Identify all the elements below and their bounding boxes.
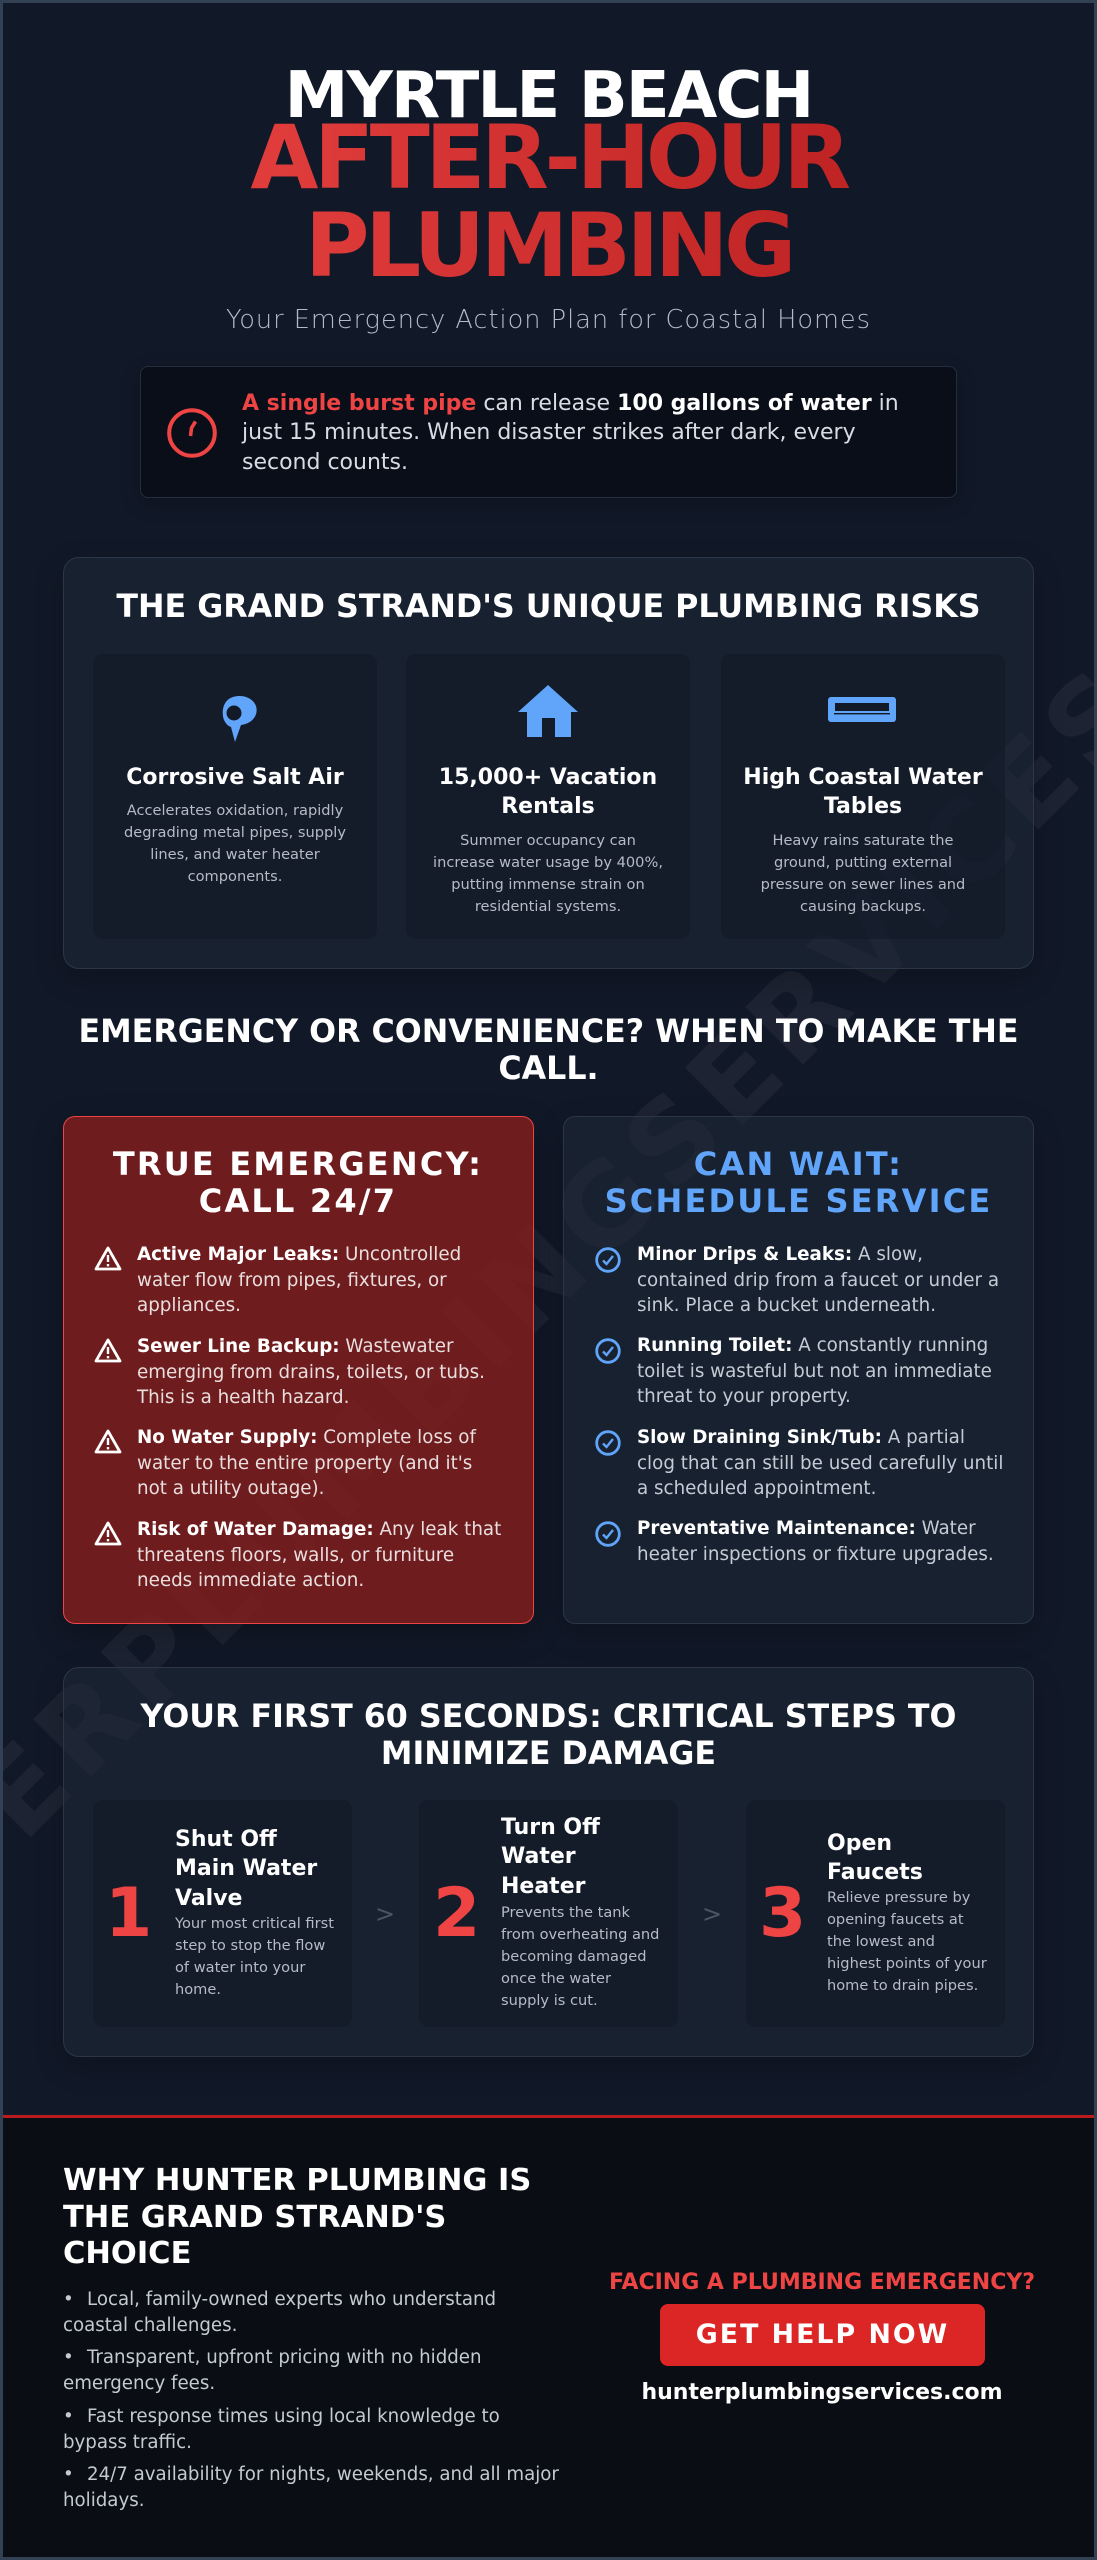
callout text xyxy=(242,391,899,475)
card title: Tables xyxy=(824,794,902,819)
website: hunterplumbingservices.com xyxy=(641,2380,1003,2405)
heading: plumbing risks: THE GRAND STRAND'S UNIQUE PLUMBING RISKS xyxy=(116,589,981,625)
step title: Heater xyxy=(501,1874,585,1899)
text: emerging from drains, toilets, or tubs. xyxy=(137,1362,485,1383)
step title: Shut Off xyxy=(175,1827,277,1852)
title line: After-Hour Plumbing: PLUMBING xyxy=(305,194,792,297)
list item: no water xyxy=(94,1427,476,1499)
icon: pin xyxy=(222,696,257,742)
step text: opening faucets at xyxy=(827,1911,964,1928)
list item: running toilet xyxy=(595,1335,992,1407)
bullet: Transparent, upfront pricing with no hidden xyxy=(87,2347,482,2368)
card: vacation rentals xyxy=(406,654,690,939)
text: Slow Draining Sink/Tub: A partial xyxy=(637,1427,965,1448)
footer xyxy=(0,2115,1097,2560)
text: toilet is wasteful but not an immediate xyxy=(637,1361,992,1382)
text: Running Toilet: A constantly running xyxy=(637,1335,988,1356)
step text: Your most critical first xyxy=(175,1915,334,1932)
bullet: 24/7 availability for nights, weekends, and all major xyxy=(87,2464,559,2485)
step text: highest points of your xyxy=(827,1955,987,1972)
callout text: A single burst pipe can release 100 gallons of water in xyxy=(242,391,899,416)
callout: burst pipe xyxy=(140,366,957,498)
heading: true emergency xyxy=(113,1145,483,1220)
cta prompt: FACING A PLUMBING EMERGENCY? xyxy=(609,2270,1035,2295)
step title: Turn Off xyxy=(501,1815,600,1840)
text: threatens floors, walls, or furniture xyxy=(137,1545,454,1566)
footer heading: CHOICE xyxy=(63,2236,191,2271)
bullet xyxy=(63,2462,559,2514)
list item: sewer backup xyxy=(94,1336,485,1408)
heading: true emergency: CALL 24/7 xyxy=(199,1182,397,1220)
heading: first 60 seconds xyxy=(140,1699,956,1772)
text: Preventative Maintenance: Water xyxy=(637,1518,976,1539)
icon: warning xyxy=(94,1246,122,1270)
heading: can wait: SCHEDULE SERVICE xyxy=(605,1182,992,1220)
card title: 15,000+ Vacation xyxy=(439,765,657,790)
panel: true emergency xyxy=(63,1116,534,1624)
icon: house xyxy=(518,685,578,737)
step text: from overheating and xyxy=(501,1926,659,1943)
icon: clock xyxy=(167,408,217,458)
bullet xyxy=(63,2287,496,2339)
heading: emergency or convenience xyxy=(78,1014,1018,1087)
card text: Accelerates oxidation, rapidly xyxy=(127,802,343,819)
step text: supply is cut. xyxy=(501,1992,598,2009)
list item: water damage xyxy=(94,1519,501,1591)
icon: check xyxy=(595,1521,621,1547)
text xyxy=(637,1335,992,1407)
card: salt air xyxy=(93,654,377,939)
text: No Water Supply: Complete loss of xyxy=(137,1427,476,1448)
text: contained drip from a faucet or under a xyxy=(637,1270,999,1291)
panel: can wait xyxy=(563,1116,1034,1624)
text: sink. Place a bucket underneath. xyxy=(637,1295,936,1316)
footer heading xyxy=(63,2163,531,2273)
step title xyxy=(827,1829,923,1888)
step 3 xyxy=(746,1800,1005,2027)
card title xyxy=(439,765,657,819)
panel: first 60 seconds xyxy=(63,1667,1034,2057)
list item: slow drain xyxy=(595,1427,1003,1499)
step text: home to drain pipes. xyxy=(827,1977,978,1994)
step title xyxy=(501,1813,600,1901)
heading: emergency or convenience: EMERGENCY OR CONVENIENCE? WHEN TO MAKE THE xyxy=(78,1014,1018,1050)
footer heading: WHY HUNTER PLUMBING IS xyxy=(63,2163,531,2198)
card title: Corrosive Salt Air xyxy=(126,765,344,790)
step text: Prevents the tank xyxy=(501,1904,630,1921)
step text: becoming damaged xyxy=(501,1948,646,1965)
icon: warning xyxy=(94,1430,122,1454)
number: 2 xyxy=(433,1874,480,1953)
text: heater inspections or fixture upgrades. xyxy=(637,1544,994,1565)
card text: Heavy rains saturate the xyxy=(772,832,954,849)
callout text: second counts. xyxy=(242,450,408,475)
title line: After-Hour Plumbing xyxy=(0,114,1097,290)
subtitle: Your Emergency Action Plan for Coastal Homes xyxy=(226,305,871,335)
bullet xyxy=(63,2404,500,2456)
card text: ground, putting external xyxy=(774,854,952,871)
step title: Faucets xyxy=(827,1860,923,1885)
card: water tables xyxy=(721,654,1005,939)
panel: coastal risks xyxy=(63,557,1034,969)
step text xyxy=(827,1887,987,1997)
icon: check xyxy=(595,1430,621,1456)
callout text: just 15 minutes. When disaster strikes after dark, every xyxy=(242,420,856,445)
footer heading: THE GRAND STRAND'S xyxy=(63,2200,446,2235)
step title: Open xyxy=(827,1831,892,1856)
step text: Relieve pressure by xyxy=(827,1889,970,1906)
bullet: • xyxy=(63,2406,74,2427)
cta button: GET HELP NOW xyxy=(696,2319,949,2350)
text: clog that can still be used carefully until xyxy=(637,1453,1003,1474)
bullet: bypass traffic. xyxy=(63,2432,192,2453)
text: water flow from pipes, fixtures, or xyxy=(137,1270,447,1291)
icon: warning xyxy=(94,1338,122,1362)
text: appliances. xyxy=(137,1295,241,1316)
title line: Myrtle Beach: MYRTLE BEACH xyxy=(285,59,812,133)
text xyxy=(137,1427,476,1499)
bullet: Local, family-owned experts who understand xyxy=(87,2289,496,2310)
bullet: emergency fees. xyxy=(63,2373,215,2394)
heading: can wait xyxy=(605,1145,992,1220)
text xyxy=(137,1244,461,1316)
arrow 1: > xyxy=(375,1900,395,1928)
card text: Summer occupancy can xyxy=(460,832,636,849)
heading: true emergency: TRUE EMERGENCY: xyxy=(113,1145,483,1183)
step title: Main Water xyxy=(175,1856,317,1881)
bullet: • xyxy=(63,2464,74,2485)
bullet xyxy=(63,2345,482,2397)
list item: minor drips xyxy=(595,1244,999,1316)
card text: lines, and water heater xyxy=(150,846,320,863)
card text xyxy=(124,802,346,885)
text xyxy=(637,1518,994,1565)
card text xyxy=(433,832,663,915)
text xyxy=(637,1244,999,1316)
icon: check xyxy=(595,1338,621,1364)
bullet: coastal challenges. xyxy=(63,2315,237,2336)
bullet list xyxy=(63,2284,583,2524)
list item: major leaks xyxy=(94,1244,461,1316)
heading: first 60 seconds: MINIMIZE DAMAGE xyxy=(381,1736,716,1772)
card title: High Coastal Water xyxy=(743,765,983,790)
step 2 xyxy=(419,1800,678,2027)
step 1 xyxy=(93,1800,352,2027)
text: This is a health hazard. xyxy=(137,1387,349,1408)
step title: Water xyxy=(501,1844,576,1869)
step text: home. xyxy=(175,1981,221,1998)
title xyxy=(250,59,850,297)
bullet: holidays. xyxy=(63,2490,144,2511)
heading: emergency or convenience: CALL. xyxy=(498,1051,599,1087)
card text: putting immense strain on xyxy=(451,876,645,893)
text: Sewer Line Backup: Wastewater xyxy=(137,1336,454,1357)
card text: increase water usage by 400%, xyxy=(433,854,663,871)
text xyxy=(136,1336,485,1408)
bullet: Fast response times using local knowledge to xyxy=(87,2406,500,2427)
icon: vent xyxy=(828,697,896,722)
text: a scheduled appointment. xyxy=(637,1478,876,1499)
step title xyxy=(175,1827,318,1911)
text: Active Major Leaks: Uncontrolled xyxy=(137,1244,461,1265)
card text xyxy=(761,832,965,915)
card text: residential systems. xyxy=(475,898,621,915)
heading: first 60 seconds: YOUR FIRST 60 SECONDS: CRITICAL STEPS TO xyxy=(141,1699,956,1735)
step text: once the water xyxy=(501,1970,611,1987)
card text: degrading metal pipes, supply xyxy=(124,824,346,841)
text: Risk of Water Damage: Any leak that xyxy=(137,1519,501,1540)
card text: components. xyxy=(188,868,282,885)
text xyxy=(137,1519,501,1591)
text: water to the entire property (and it's xyxy=(137,1453,472,1474)
text: Minor Drips & Leaks: A slow, xyxy=(637,1244,923,1265)
icon: warning xyxy=(94,1522,122,1546)
icon: check xyxy=(595,1247,621,1273)
text: not a utility outage). xyxy=(137,1478,324,1499)
text: threat to your property. xyxy=(637,1386,851,1407)
title line: After-Hour Plumbing: AFTER-HOUR xyxy=(250,106,847,209)
bullet: • xyxy=(63,2347,74,2368)
card title xyxy=(743,765,983,819)
card title: Rentals xyxy=(501,794,595,819)
heading: can wait: CAN WAIT: xyxy=(694,1145,903,1183)
card text: pressure on sewer lines and xyxy=(761,876,965,893)
step text xyxy=(501,1902,659,2012)
text: needs immediate action. xyxy=(137,1570,364,1591)
step title: Valve xyxy=(175,1886,242,1911)
text xyxy=(637,1427,1003,1499)
number: 3 xyxy=(759,1874,806,1953)
step text xyxy=(175,1913,334,2001)
arrow 2: > xyxy=(702,1900,722,1928)
cta button xyxy=(660,2304,985,2366)
step text: of water into your xyxy=(175,1959,305,1976)
step text: the lowest and xyxy=(827,1933,935,1950)
card text: causing backups. xyxy=(800,898,926,915)
number: 1 xyxy=(105,1874,152,1953)
step text: step to stop the flow xyxy=(175,1937,325,1954)
list item: maintenance xyxy=(595,1518,994,1565)
bullet: • xyxy=(63,2289,74,2310)
